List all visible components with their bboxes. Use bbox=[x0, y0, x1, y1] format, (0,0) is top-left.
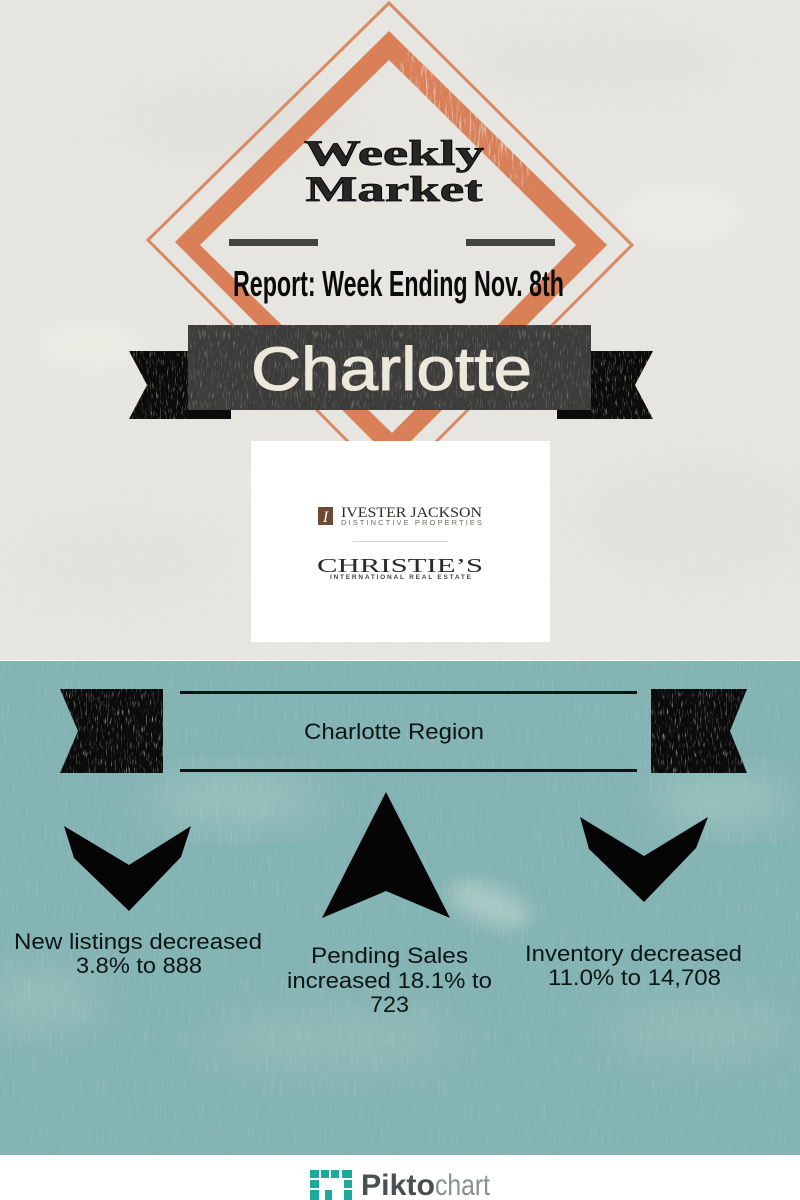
subtitle: Report: Week Ending Nov. 8th bbox=[233, 263, 564, 304]
logo: Ivester Jackson: IVESTER JACKSON bbox=[341, 505, 482, 521]
icon: down arrow bbox=[580, 817, 708, 902]
ribbon text: Charlotte bbox=[251, 335, 532, 403]
logo: Christie's: CHRISTIE’S bbox=[317, 555, 483, 577]
stat text: 11.0% to 14,708 bbox=[548, 965, 721, 990]
title: Weekly Market: Market bbox=[306, 169, 483, 209]
left divider bar bbox=[229, 239, 318, 246]
icon: down arrow bbox=[64, 826, 191, 911]
outer thin diamond bbox=[148, 3, 632, 486]
right flag bbox=[651, 689, 747, 773]
section ribbon: Charlotte Region bbox=[60, 689, 747, 773]
footer bbox=[0, 1155, 800, 1200]
stat text: 723 bbox=[370, 992, 409, 1017]
title: Weekly Market: Weekly bbox=[304, 133, 484, 173]
right ribbon tail bbox=[557, 351, 653, 419]
stat: pending sales bbox=[287, 792, 498, 1017]
stat text: Pending Sales bbox=[311, 943, 468, 968]
logo: Christie's bbox=[317, 555, 483, 581]
ribbon: Charlotte bbox=[129, 325, 653, 419]
stat text: 3.8% to 888 bbox=[76, 953, 202, 978]
section heading: Charlotte Region bbox=[304, 719, 484, 744]
right divider bar bbox=[466, 239, 555, 246]
header background: cream paper bbox=[0, 0, 800, 661]
stat text: New listings decreased bbox=[14, 929, 262, 954]
logo: Christie's: INTERNATIONAL REAL ESTATE bbox=[330, 574, 472, 581]
diamond frame bbox=[148, 3, 632, 486]
left flag bbox=[60, 689, 163, 773]
logo: Ivester Jackson: DISTINCTIVE PROPERTIES bbox=[341, 518, 482, 527]
logo: Ivester Jackson: I bbox=[322, 509, 329, 526]
logo: Ivester Jackson bbox=[318, 505, 482, 527]
white logo panel bbox=[251, 441, 550, 642]
left ribbon tail bbox=[129, 351, 231, 419]
stat text: increased 18.1% to bbox=[287, 968, 492, 993]
inner thick diamond band bbox=[175, 31, 607, 460]
stat text: Inventory decreased bbox=[525, 941, 742, 966]
title: Weekly Market bbox=[304, 133, 484, 209]
stat: inventory bbox=[525, 817, 748, 990]
teal section background bbox=[0, 661, 800, 1155]
ribbon centre panel bbox=[188, 325, 591, 410]
icon: up arrow bbox=[322, 792, 450, 918]
worn texture on band bbox=[400, 40, 530, 190]
stat: new listings bbox=[14, 826, 268, 978]
icon: Piktochart logo bbox=[310, 1170, 352, 1200]
